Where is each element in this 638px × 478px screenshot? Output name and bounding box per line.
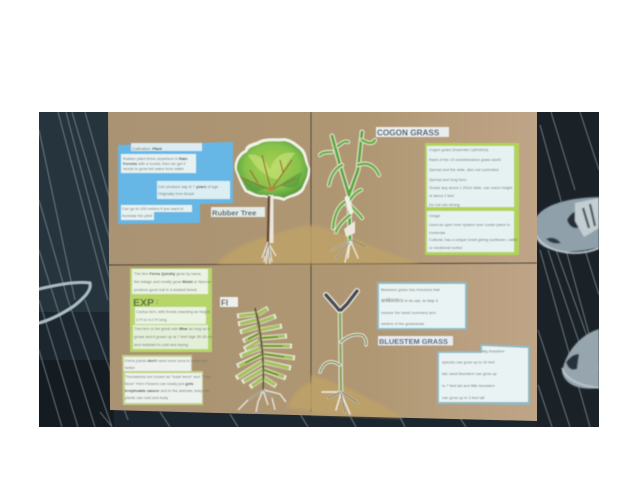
icon: fern illustration (236, 308, 295, 412)
fern info box (130, 268, 213, 352)
rubber tree info box: Can produce sap in 7 years of age (158, 184, 218, 189)
board fold lines (108, 112, 537, 412)
panel: cogon grass (320, 127, 519, 262)
left shoe strap (39, 282, 90, 323)
fern note box: Ferns plants don't need more area to moist and (125, 358, 208, 363)
bluestem species box: Big bluestem (482, 348, 504, 354)
icon: cogon grass illustration (320, 132, 379, 262)
rubber tree info box: Originally from Brazil (158, 191, 194, 196)
poster board (108, 112, 537, 421)
bluestem info box (377, 282, 467, 330)
rubber tree info box (118, 142, 233, 224)
icon: bluestem grass illustration (320, 291, 366, 414)
bluestem info box: resolve the harsh summers and (381, 310, 436, 315)
bluestem info box: antibiotics in its use, to help it (381, 298, 439, 304)
cogon grass info box: Used as open river system over cooler place in (429, 222, 510, 227)
cogon grass info box: Do not use strong (429, 202, 460, 207)
cogon grass info box: Cogon grass (Imperata Cylindrica) (429, 147, 489, 152)
rubber tree info box: increase the yield (122, 213, 152, 218)
yellow hills (217, 225, 420, 418)
bluestem species box (437, 344, 530, 405)
cogon grass info box: Usage (429, 213, 440, 218)
rubber tree info box: needs to grow but warm from water (123, 166, 185, 171)
fern label (220, 297, 238, 308)
cogon grass label: COGON GRASS (377, 128, 440, 138)
panel: bluestem grass (320, 282, 530, 414)
fern info box: Tree fern is the great vein Blue as long as it (134, 326, 210, 331)
bluestem species box: species can grow up to 10 feet (442, 360, 496, 364)
bluestem species box: can grow up to 3 feet tall (442, 395, 485, 400)
cogon grass info box: Cultural, has a unique smell giving sunflower, cattle (429, 237, 517, 242)
fern info box: and resistant to cold and drying (134, 342, 188, 347)
carpet background (39, 112, 599, 427)
fern info box: The fern Ferns Quickly grow by name, (134, 271, 202, 276)
fern info box: produce good soil in a shaded forest (134, 287, 198, 292)
rubber tree label: Rubber Tree (212, 208, 256, 218)
fern info box: EXP (133, 297, 154, 309)
cogon grass info box (425, 143, 519, 255)
fern note box: irreplicable cancer and to the animals, keep the (125, 388, 209, 393)
rubber tree info box: Rubber plant thrive anywhere in Rain (123, 156, 188, 161)
fern note box (122, 355, 211, 405)
fern info box: 3 Ft to 4.0 Ft long (136, 317, 166, 322)
photo of poster board on striped carpet (39, 112, 599, 427)
cogon grass info box: Spread and long form (429, 177, 466, 182)
fern note box: better (125, 365, 136, 370)
bluestem info box: winters of the grasslands (381, 321, 424, 326)
cogon grass info box: moderate (429, 230, 445, 235)
bluestem species box: to 7 feet tall and little bluestem (442, 383, 495, 388)
panel: fern (122, 268, 295, 412)
cogon grass info box: of about 2 feet (429, 193, 455, 198)
cogon grass info box: Rank of the 10 worst/invasive grass world (429, 157, 501, 162)
fern info box: grows and it grown up at 7 feet high 35.35 cm (134, 334, 213, 339)
fern note box: favor" Fern Flowers can easily just gets (125, 381, 193, 386)
rubber tree info box: Cultivation: Plant (132, 146, 163, 151)
bluestem species box: tall, sand bluestem can grow up (442, 371, 497, 376)
bluestem info box: Bluestem grass has rhizomes that (381, 287, 441, 292)
fern info box: : (154, 299, 158, 306)
fern note box: Themselves are known as "trash ferns" and "They (125, 374, 211, 379)
rubber tree info box: Can go to 100 meters if you want to (122, 206, 183, 211)
fern label: FI (221, 298, 228, 308)
cogon grass info box: or medicinal roofed (429, 245, 462, 250)
fern info box: Cactus fern, with fronds reaching an height (136, 309, 211, 314)
right shoe top (533, 197, 599, 253)
cogon grass info box: Grows any about 1.20cm wide, can reach height (429, 185, 513, 190)
right shoe bottom (562, 329, 599, 389)
bluestem grass label: BLUESTEM GRASS (379, 337, 448, 346)
fern note box: plants can cold and body (125, 395, 168, 400)
icon: rubber tree illustration (235, 138, 310, 264)
panel: rubber tree (118, 138, 310, 264)
cogon grass info box: Spread and the wide, also not controlled (429, 167, 498, 172)
rubber tree info box: Forests with a humid, then we get it (123, 161, 186, 166)
fern info box: the foliage and mostly grow Moist or Narrow (134, 279, 211, 284)
